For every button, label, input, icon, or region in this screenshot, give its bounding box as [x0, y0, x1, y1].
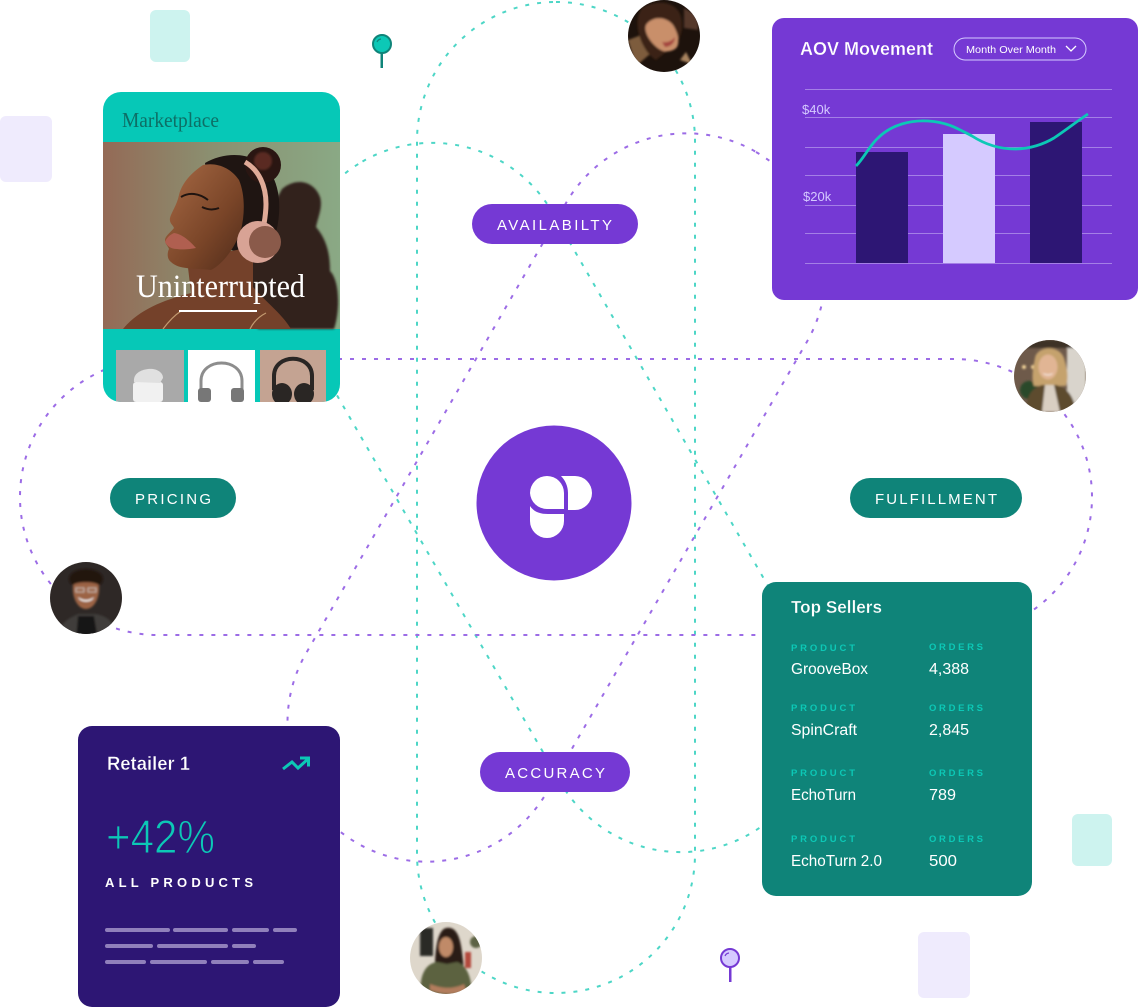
panel: marketplace card — [103, 92, 340, 405]
pill: fulfillment — [850, 478, 1022, 518]
avatar: woman with curly hair — [628, 0, 700, 72]
column labels: ORDERS — [929, 703, 983, 714]
column labels: ORDERS — [929, 834, 983, 845]
column labels: PRODUCT — [791, 768, 855, 779]
dropdown: month over month — [954, 38, 1086, 60]
row values: 2,845 — [929, 722, 969, 739]
column labels: ORDERS — [929, 642, 983, 653]
hero title: Uninterrupted — [136, 269, 305, 305]
big stat: +42% — [106, 810, 215, 863]
row values: GrooveBox — [791, 661, 868, 678]
grid lines — [805, 90, 1112, 264]
avatar: man with glasses — [50, 562, 122, 640]
dropdown: month over month: Month Over Month — [966, 44, 1056, 56]
row values: 500 — [929, 853, 957, 870]
axis labels: $20k — [803, 189, 832, 204]
row values: 789 — [929, 787, 956, 804]
hero photo — [103, 142, 340, 329]
thumbnails — [116, 350, 326, 405]
panel: AOV movement chart — [772, 18, 1138, 300]
icon: trending up arrow — [283, 758, 308, 769]
row values — [791, 661, 969, 870]
pill: pricing — [110, 478, 236, 518]
row values: EchoTurn 2.0 — [791, 853, 882, 870]
column labels: PRODUCT — [791, 703, 855, 714]
column labels: PRODUCT — [791, 643, 855, 654]
row values: SpinCraft — [791, 722, 858, 739]
pill: accuracy: ACCURACY — [505, 765, 605, 782]
heading: AOV movement: AOV Movement — [800, 38, 933, 59]
pin: purple — [721, 949, 739, 982]
axis labels — [802, 102, 832, 204]
heading: marketplace: Marketplace — [122, 108, 219, 132]
top sellers heading: Top Sellers — [791, 597, 882, 617]
panel: retailer card — [78, 726, 340, 1007]
column labels — [791, 642, 983, 845]
pin: teal — [373, 35, 391, 68]
row values: 4,388 — [929, 661, 969, 678]
pill: pricing: PRICING — [135, 491, 211, 508]
row values: EchoTurn — [791, 787, 856, 804]
avatar: woman in green shirt — [410, 922, 482, 996]
bars — [856, 122, 1082, 263]
column labels: ORDERS — [929, 768, 983, 779]
pill: availability — [472, 204, 638, 244]
column labels: PRODUCT — [791, 834, 855, 845]
axis labels: $40k — [802, 102, 831, 117]
avatar: blonde woman — [1014, 340, 1086, 412]
center logo — [476, 426, 632, 580]
trend line — [856, 114, 1088, 166]
panel: top sellers table — [762, 582, 1032, 896]
placeholder text lines — [105, 928, 297, 964]
retailer title: Retailer 1 — [107, 753, 190, 775]
pill: availability: AVAILABILTY — [497, 217, 612, 234]
pill: fulfillment: FULFILLMENT — [875, 491, 997, 508]
stat label: ALL PRODUCTS — [105, 875, 253, 890]
pill: accuracy — [480, 752, 630, 792]
